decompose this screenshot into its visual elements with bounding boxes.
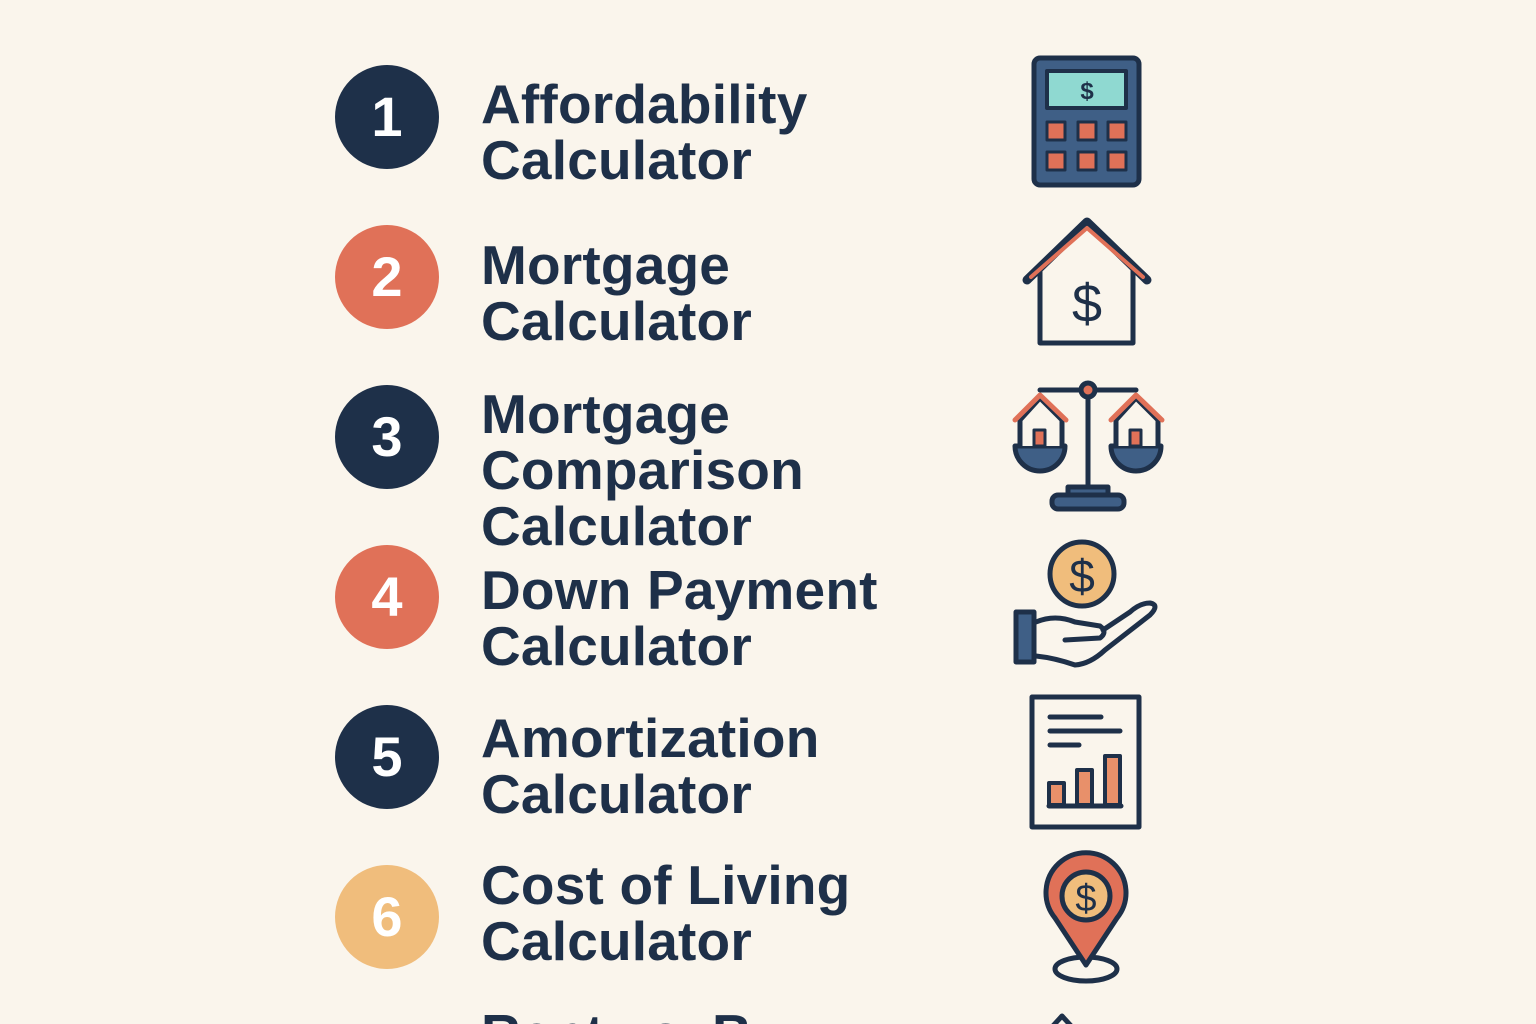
item 1 label: Affordability xyxy=(481,73,807,135)
item 2 number xyxy=(335,225,439,329)
item 4 label: Down Payment xyxy=(481,559,878,621)
item 5 label xyxy=(481,707,820,825)
item 3 number xyxy=(335,385,439,489)
item 3 number: 3 xyxy=(371,405,403,468)
item 2 number: 2 xyxy=(371,245,403,308)
item 2 label: Calculator xyxy=(481,290,752,352)
icon: hand with coin xyxy=(1016,542,1155,665)
item 3 label: Calculator xyxy=(481,495,752,557)
item 1 label xyxy=(481,73,807,191)
icon: house with dollar xyxy=(1027,222,1147,343)
icon: calculator: $ xyxy=(1080,78,1094,105)
icon: house (partial) xyxy=(1040,1016,1084,1024)
item 6 label xyxy=(481,854,850,972)
item 4 number: 4 xyxy=(371,565,403,628)
item 6 number xyxy=(335,865,439,969)
icon: document with bar chart xyxy=(1032,697,1139,827)
item 2 label: Mortgage xyxy=(481,234,730,296)
icon: calculator xyxy=(1034,58,1139,185)
item 3 label: Mortgage xyxy=(481,383,730,445)
item 6 label: Cost of Living xyxy=(481,854,850,916)
item 5 label: Calculator xyxy=(481,763,752,825)
item 1 number xyxy=(335,65,439,169)
icon: scale with houses xyxy=(1015,383,1162,509)
item 1 label: Calculator xyxy=(481,129,752,191)
item 2 label xyxy=(481,234,752,352)
item 4 number xyxy=(335,545,439,649)
item 5 number: 5 xyxy=(371,725,403,788)
item 1 number: 1 xyxy=(371,85,403,148)
icon: house with dollar: $ xyxy=(1072,274,1102,334)
icon: location pin with dollar: $ xyxy=(1075,878,1097,920)
icon: hand with coin: $ xyxy=(1069,550,1095,602)
item 6 number: 6 xyxy=(371,885,403,948)
item 5 label: Amortization xyxy=(481,707,820,769)
icon: location pin with dollar xyxy=(1046,853,1126,981)
item 6 label: Calculator xyxy=(481,910,752,972)
item 3 label xyxy=(481,383,804,557)
item 3 label: Comparison xyxy=(481,439,804,501)
item 4 label: Calculator xyxy=(481,615,752,677)
item 4 label xyxy=(481,559,878,677)
item 5 number xyxy=(335,705,439,809)
